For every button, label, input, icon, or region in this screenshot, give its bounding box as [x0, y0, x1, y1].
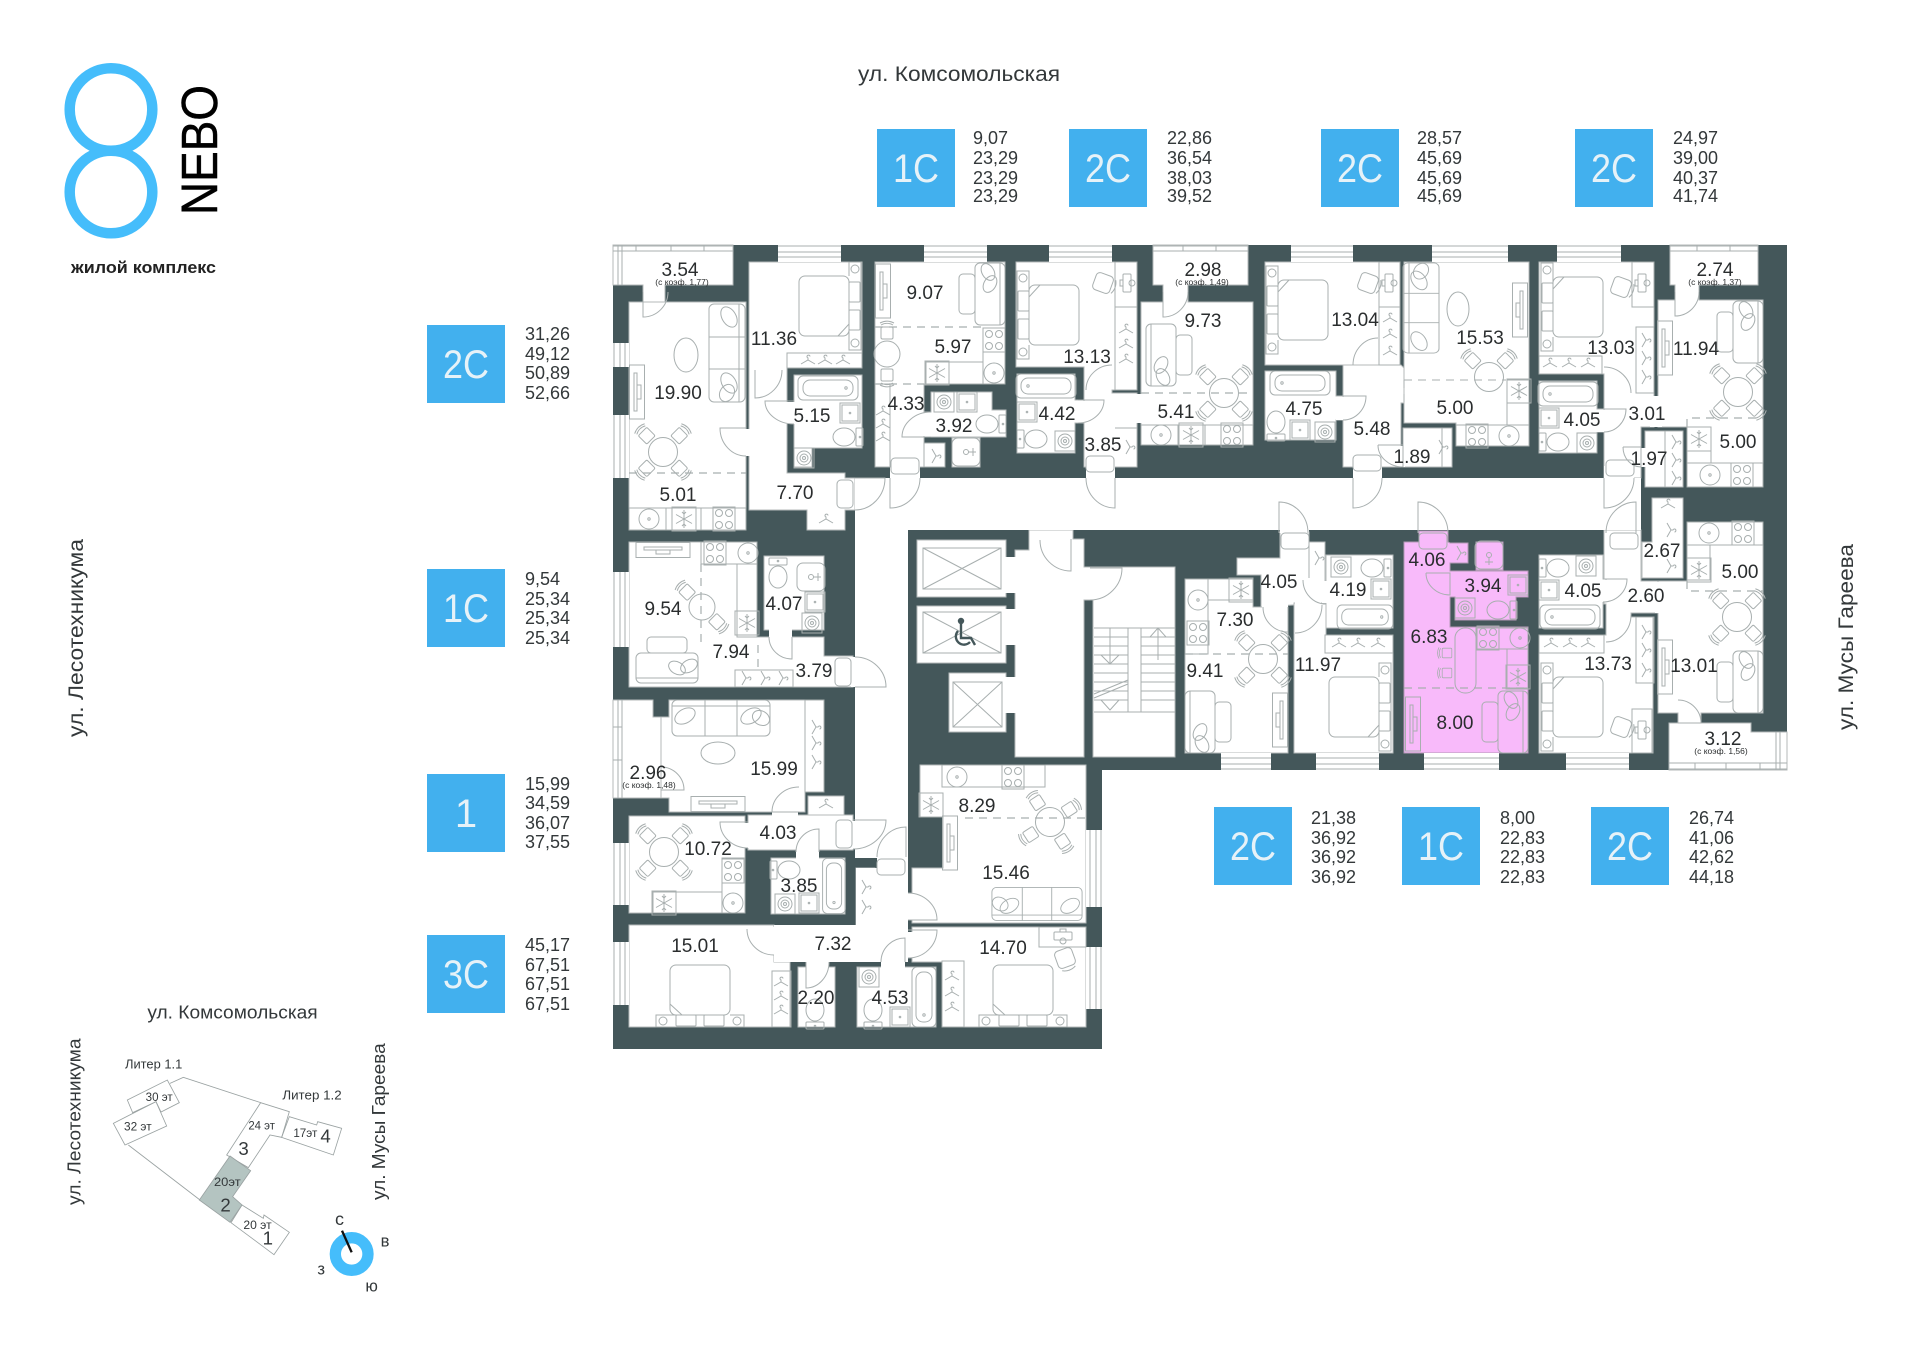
- legend: 2С left: 50,89: [525, 363, 570, 383]
- area 8.29: 8.29: [959, 796, 995, 817]
- legend: 2С bottom second: [1591, 807, 1734, 887]
- legend: 1С left: 25,34: [525, 608, 570, 628]
- area 2.20: 2.20: [798, 988, 834, 1009]
- area 13.01: 13.01: [1670, 656, 1718, 677]
- site map highlighted section 2: [199, 1156, 251, 1222]
- legend: 2С bottom second: 44,18: [1689, 867, 1734, 887]
- area 11.97: 11.97: [1295, 655, 1341, 676]
- balcony coefficient notes: (с коэф. 1,49): [1175, 277, 1229, 287]
- legend: 2С top second: 2С: [1337, 147, 1383, 191]
- site map street labels: [64, 1001, 389, 1205]
- legend: 1С top: 9,07: [973, 128, 1008, 148]
- logo figure eight: [70, 68, 152, 233]
- legend: 2С bottom second: 26,74: [1689, 808, 1734, 828]
- area 1.97: 1.97: [1631, 449, 1667, 470]
- area 3.54: 3.54: [662, 260, 699, 281]
- legend: 1С left: 9,54: [525, 569, 560, 589]
- rugs: [674, 292, 1469, 764]
- area 3.79: 3.79: [796, 661, 832, 682]
- logo wordmark NEBO: NEBO: [171, 85, 228, 215]
- area 3.85: 3.85: [1085, 435, 1121, 456]
- legend: 3С left: [427, 935, 570, 1014]
- legend: 2С top: [1069, 128, 1212, 207]
- area 13.73: 13.73: [1584, 654, 1632, 675]
- area 9.07: 9.07: [907, 283, 943, 304]
- legend: 2С bottom: 36,92: [1311, 847, 1356, 867]
- area 4.05: 4.05: [1565, 581, 1601, 602]
- area 7.32: 7.32: [815, 934, 851, 955]
- windows: [613, 245, 1787, 1009]
- area 19.90: 19.90: [654, 383, 702, 404]
- site map labels: 32 эт: [124, 1120, 152, 1134]
- area 13.04: 13.04: [1331, 310, 1379, 331]
- desks and armchairs: [1053, 271, 1650, 973]
- area 2.60: 2.60: [1628, 586, 1664, 607]
- legend: 2С left: [427, 324, 570, 403]
- balcony coefficient notes: (с коэф. 1,77): [655, 277, 709, 287]
- legend: 2С bottom second: 41,06: [1689, 828, 1734, 848]
- legend: 2С top second: 45,69: [1417, 186, 1462, 206]
- televisions: [630, 264, 1672, 870]
- street label: east: ул. Мусы Гареева: [1835, 544, 1858, 730]
- legend: 2С left: 2С: [443, 343, 489, 387]
- area 14.70: 14.70: [979, 938, 1027, 959]
- site map labels: 30 эт: [146, 1090, 173, 1104]
- area 3.94: 3.94: [1465, 576, 1502, 597]
- site map street labels: ул. Лесотехникума: [64, 1038, 85, 1205]
- area 3.01: 3.01: [1629, 404, 1665, 425]
- site map labels: 17эт: [293, 1126, 318, 1140]
- legend: 1С bottom: 22,83: [1500, 828, 1545, 848]
- doors: [643, 292, 1701, 988]
- legend: 1 left: 36,07: [525, 813, 570, 833]
- street label: north: ул. Комсомольская: [858, 63, 1060, 86]
- street label: west: ул. Лесотехникума: [65, 539, 88, 737]
- legend: 2С top second: 45,69: [1417, 148, 1462, 168]
- site map street labels: ул. Комсомольская: [147, 1001, 318, 1022]
- legend: 1С bottom: [1402, 807, 1545, 887]
- floor plan: [613, 245, 1787, 1049]
- room area labels: [630, 260, 1758, 1009]
- washing machines: [775, 392, 1597, 987]
- compass: з: [317, 1259, 325, 1278]
- legend: 2С left: 31,26: [525, 324, 570, 344]
- compass: в: [381, 1232, 390, 1251]
- area 1.89: 1.89: [1394, 447, 1430, 468]
- legend: 1С left: 25,34: [525, 589, 570, 609]
- legend: 2С top third: 40,37: [1673, 168, 1718, 188]
- legend: 2С top: 38,03: [1167, 168, 1212, 188]
- compass: ю: [365, 1277, 378, 1296]
- area 11.36: 11.36: [751, 329, 797, 350]
- toilets: [769, 411, 1569, 1029]
- legend: 1С top: 1С: [893, 147, 939, 191]
- balcony coefficient notes: (с коэф. 1,56): [1694, 746, 1748, 756]
- area 4.05: 4.05: [1564, 410, 1600, 431]
- area 4.75: 4.75: [1286, 399, 1322, 420]
- icon: wheelchair: [956, 619, 975, 645]
- area 2.96: 2.96: [630, 763, 666, 784]
- area 3.92: 3.92: [936, 416, 972, 437]
- compass: с: [335, 1209, 344, 1229]
- legend: 2С bottom: [1214, 807, 1356, 887]
- fridges: [652, 361, 1711, 915]
- legend: 2С bottom: 36,92: [1311, 867, 1356, 887]
- stoves: [704, 328, 1754, 883]
- area 5.97: 5.97: [935, 337, 971, 358]
- legend: 2С bottom: 2С: [1230, 825, 1276, 869]
- site map labels: 3: [238, 1138, 249, 1159]
- area 7.94: 7.94: [713, 642, 750, 663]
- area 4.06: 4.06: [1409, 550, 1445, 571]
- fold-out couches: [636, 261, 1763, 755]
- staircase: [1094, 628, 1175, 712]
- legend: 2С top third: 41,74: [1673, 186, 1718, 206]
- balcony coefficient notes: (с коэф. 1,37): [1688, 277, 1742, 287]
- area 4.07: 4.07: [766, 594, 802, 615]
- legend: 1С top: [877, 128, 1018, 207]
- legend: 2С top third: 2С: [1591, 147, 1637, 191]
- legend: 2С top second: 28,57: [1417, 128, 1462, 148]
- site map labels: Литер 1.1: [125, 1057, 182, 1071]
- area 15.46: 15.46: [982, 863, 1030, 884]
- site map outline: [113, 1077, 342, 1255]
- site map labels: 4: [320, 1125, 331, 1146]
- beds: [656, 262, 1603, 1027]
- legend: 1 left: 1: [455, 792, 477, 836]
- area 5.48: 5.48: [1354, 419, 1390, 440]
- area 13.13: 13.13: [1063, 347, 1111, 368]
- legend: 1С top: 23,29: [973, 168, 1018, 188]
- area 2.67: 2.67: [1644, 541, 1680, 562]
- balcony coefficient notes: (с коэф. 1,48): [622, 780, 676, 790]
- area 4.19: 4.19: [1330, 580, 1366, 601]
- legend: 2С top third: 24,97: [1673, 128, 1718, 148]
- selected apartment highlighted in pink: [1404, 531, 1528, 753]
- building walls: [613, 245, 1787, 1049]
- legend: 2С top: 2С: [1085, 147, 1131, 191]
- legend: 1 left: 15,99: [525, 774, 570, 794]
- pink apartment shower: [1476, 542, 1503, 570]
- legend: 3С left: 67,51: [525, 994, 570, 1014]
- area 5.00: 5.00: [1720, 432, 1756, 453]
- area 15.01: 15.01: [671, 936, 719, 957]
- legend: 2С left: 52,66: [525, 383, 570, 403]
- area 4.53: 4.53: [872, 988, 908, 1009]
- basins: [799, 392, 1559, 1027]
- legend: 3С left: 3С: [443, 953, 489, 997]
- legend: 1С bottom: 22,83: [1500, 867, 1545, 887]
- legend: 1 left: 37,55: [525, 832, 570, 852]
- area 7.30: 7.30: [1217, 610, 1253, 631]
- legend: 3С left: 45,17: [525, 935, 570, 955]
- area 4.05: 4.05: [1261, 572, 1297, 593]
- area 2.98: 2.98: [1185, 260, 1221, 281]
- area 11.94: 11.94: [1673, 339, 1719, 360]
- area 9.41: 9.41: [1187, 661, 1223, 682]
- area 9.54: 9.54: [645, 599, 682, 620]
- balcony and room dividers: [629, 327, 1763, 818]
- area 3.12: 3.12: [1705, 729, 1741, 750]
- legend: 1С left: [427, 569, 570, 648]
- site map labels: 24 эт: [248, 1118, 275, 1132]
- legend: 2С top: 22,86: [1167, 128, 1212, 148]
- area 10.72: 10.72: [684, 839, 732, 860]
- area 5.00: 5.00: [1437, 398, 1473, 419]
- site map labels: Литер 1.2: [282, 1088, 342, 1102]
- site map labels: 1: [263, 1227, 273, 1248]
- door openings: [743, 394, 1662, 969]
- logo subtitle: жилой комплекс: [70, 258, 216, 277]
- area 15.99: 15.99: [750, 759, 798, 780]
- legend: 2С bottom second: 2С: [1607, 825, 1653, 869]
- legend: 1 left: 34,59: [525, 793, 570, 813]
- legend: 2С left: 49,12: [525, 344, 570, 364]
- apartment legend: types and areas: [427, 128, 1734, 1014]
- area 3.85: 3.85: [781, 876, 817, 897]
- legend: 3С left: 67,51: [525, 974, 570, 994]
- kitchen counters: [629, 328, 1763, 913]
- legend: 2С top second: 45,69: [1417, 168, 1462, 188]
- legend: 2С bottom: 36,92: [1311, 828, 1356, 848]
- area 5.00: 5.00: [1722, 562, 1758, 583]
- legend: 1С bottom: 8,00: [1500, 808, 1535, 828]
- area 2.74: 2.74: [1697, 260, 1734, 281]
- legend: 1С top: 23,29: [973, 148, 1018, 168]
- area 9.73: 9.73: [1185, 311, 1221, 332]
- site map street labels: ул. Мусы Гареева: [368, 1043, 389, 1200]
- sofas: [672, 261, 1439, 921]
- area 15.53: 15.53: [1456, 328, 1504, 349]
- site map: building location: [64, 1001, 390, 1296]
- elevators: [923, 548, 1002, 727]
- area 5.41: 5.41: [1158, 402, 1194, 423]
- balcony coefficient notes: [622, 277, 1748, 790]
- legend: 2С top second: [1321, 128, 1462, 207]
- site map labels: [124, 1057, 342, 1248]
- area 5.15: 5.15: [794, 406, 830, 427]
- area 13.03: 13.03: [1587, 338, 1635, 359]
- kitchen sinks: [639, 363, 1720, 913]
- showers: [797, 438, 1503, 591]
- area 4.42: 4.42: [1039, 404, 1075, 425]
- closets: [735, 262, 1665, 1027]
- corridor: [774, 478, 1641, 962]
- area 4.03: 4.03: [760, 823, 796, 844]
- area 7.70: 7.70: [777, 483, 813, 504]
- legend: 2С bottom second: 42,62: [1689, 847, 1734, 867]
- rooms: [613, 245, 1787, 1027]
- legend: 2С bottom: 21,38: [1311, 808, 1356, 828]
- logo: NEBO residential complex: [70, 68, 228, 277]
- site map labels: 20эт: [214, 1175, 241, 1189]
- legend: 2С top: 36,54: [1167, 148, 1212, 168]
- legend: 3С left: 67,51: [525, 955, 570, 975]
- site map labels: 2: [220, 1195, 231, 1216]
- legend: 1С bottom: 22,83: [1500, 847, 1545, 867]
- legend: 1 left: [427, 774, 570, 852]
- site map labels: 20 эт: [243, 1218, 272, 1232]
- bathtubs: [798, 371, 1600, 1027]
- door mats: [835, 455, 1638, 875]
- area 6.83: 6.83: [1411, 627, 1447, 648]
- area 4.33: 4.33: [888, 394, 924, 415]
- hangers: [742, 313, 1681, 1014]
- legend: 2С top: 39,52: [1167, 186, 1212, 206]
- legend: 1С left: 25,34: [525, 628, 570, 648]
- dining tables: [633, 321, 1768, 882]
- area 5.01: 5.01: [660, 485, 696, 506]
- compass: [317, 1209, 390, 1296]
- legend: 1С bottom: 1С: [1418, 825, 1464, 869]
- area 8.00: 8.00: [1437, 713, 1473, 734]
- pink apartment rooms: [1404, 531, 1528, 753]
- legend: 1С left: 1С: [443, 587, 489, 631]
- legend: 2С top third: [1575, 128, 1718, 207]
- legend: 2С top third: 39,00: [1673, 148, 1718, 168]
- legend: 1С top: 23,29: [973, 186, 1018, 206]
